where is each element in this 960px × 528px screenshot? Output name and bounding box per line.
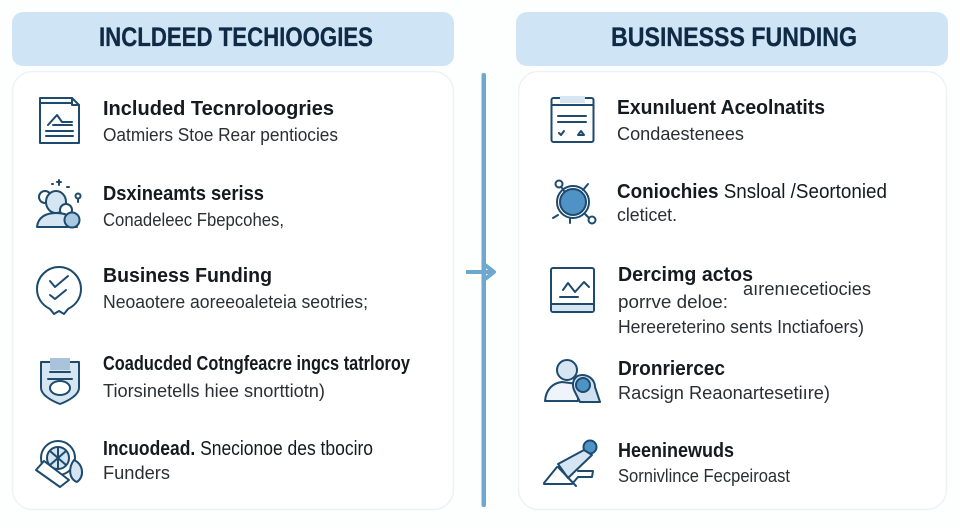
row 3 text: Neoaotere aoreeoaleteia seotries; <box>103 292 368 312</box>
right row 2 <box>553 180 887 225</box>
row 3 text <box>618 264 871 337</box>
icon: badge with check <box>37 267 81 314</box>
right list card <box>518 72 946 510</box>
row 3 text: Hereereterino sents Inctiafoers) <box>618 317 864 337</box>
left row 3 <box>37 265 368 314</box>
icon: people with sparkles <box>37 180 80 228</box>
row 5 text <box>618 440 790 486</box>
icon: gauge with hand <box>36 441 82 487</box>
right panel: business funding <box>516 12 948 510</box>
row 2 text <box>617 181 887 225</box>
left row 5 <box>36 438 373 487</box>
row 4 text: Tiorsinetells hiee snorttiotn) <box>103 381 325 401</box>
icon: shield <box>41 358 79 404</box>
row 1 text: Condaestenees <box>617 124 744 144</box>
icon: document with chart <box>40 98 79 143</box>
row 2 text: cleticet. <box>617 205 677 225</box>
icon: network circle <box>553 180 596 224</box>
row 3 text: aırenıecetiocies <box>743 279 871 299</box>
row 4 text <box>103 353 411 401</box>
left header banner <box>12 12 454 66</box>
row 1 text: Exunıluent Aceolnatits <box>617 97 825 119</box>
right row 1 <box>552 96 825 144</box>
right row 3 <box>551 264 871 337</box>
left row 4 <box>41 353 411 404</box>
row 5 text <box>103 438 373 483</box>
left row 2 <box>37 180 284 230</box>
row 2 text: Dsxineamts seriss <box>103 183 264 205</box>
right row 5 <box>544 440 790 486</box>
row 1 text <box>617 97 825 144</box>
right header banner: BUSINESSS FUNDING <box>611 22 857 52</box>
left list card <box>12 72 454 510</box>
row 1 text: Included Tecnroloogries <box>103 98 334 120</box>
row 2 text: Coniochies Snsloal /Seortonied <box>617 181 887 203</box>
left panel: included technologies <box>12 12 454 510</box>
row 5 text: Incuodead. Snecionoe des tbociro <box>103 438 373 460</box>
right row 4 <box>545 358 830 403</box>
row 5 text: Funders <box>103 463 170 483</box>
row 3 text: Business Funding <box>103 265 272 287</box>
row 1 text <box>103 98 338 145</box>
row 4 text <box>618 358 830 403</box>
row 1 text: Oatmiers Stoe Rear pentiocies <box>103 125 338 145</box>
row 4 text: Coaducded Cotngfeacre ingcs tatrloroy <box>103 353 411 375</box>
icon: clipboard <box>552 96 594 142</box>
row 3 text: Dercimg actos <box>618 264 753 286</box>
row 3 text: porrve deloe: <box>618 292 728 312</box>
icon: tablet with chart <box>551 268 594 312</box>
left header banner: INCLDEED TECHIOOGIES <box>99 22 373 52</box>
row 5 text: Heeninewuds <box>618 440 734 462</box>
row 4 text: Racsign Reaonartesetiıre) <box>618 383 830 403</box>
left row 1 <box>40 98 338 145</box>
icon: person with location pin <box>545 360 600 402</box>
row 4 text: Dronriercec <box>618 358 725 380</box>
center divider with arrow <box>466 73 494 507</box>
right header banner <box>516 12 948 66</box>
row 3 text <box>103 265 368 312</box>
row 2 text <box>103 183 284 230</box>
icon: pen signing document <box>544 440 596 486</box>
row 2 text: Conadeleec Fbepcohes, <box>103 210 284 230</box>
row 5 text: Sornivlince Fecpeiroast <box>618 466 790 486</box>
